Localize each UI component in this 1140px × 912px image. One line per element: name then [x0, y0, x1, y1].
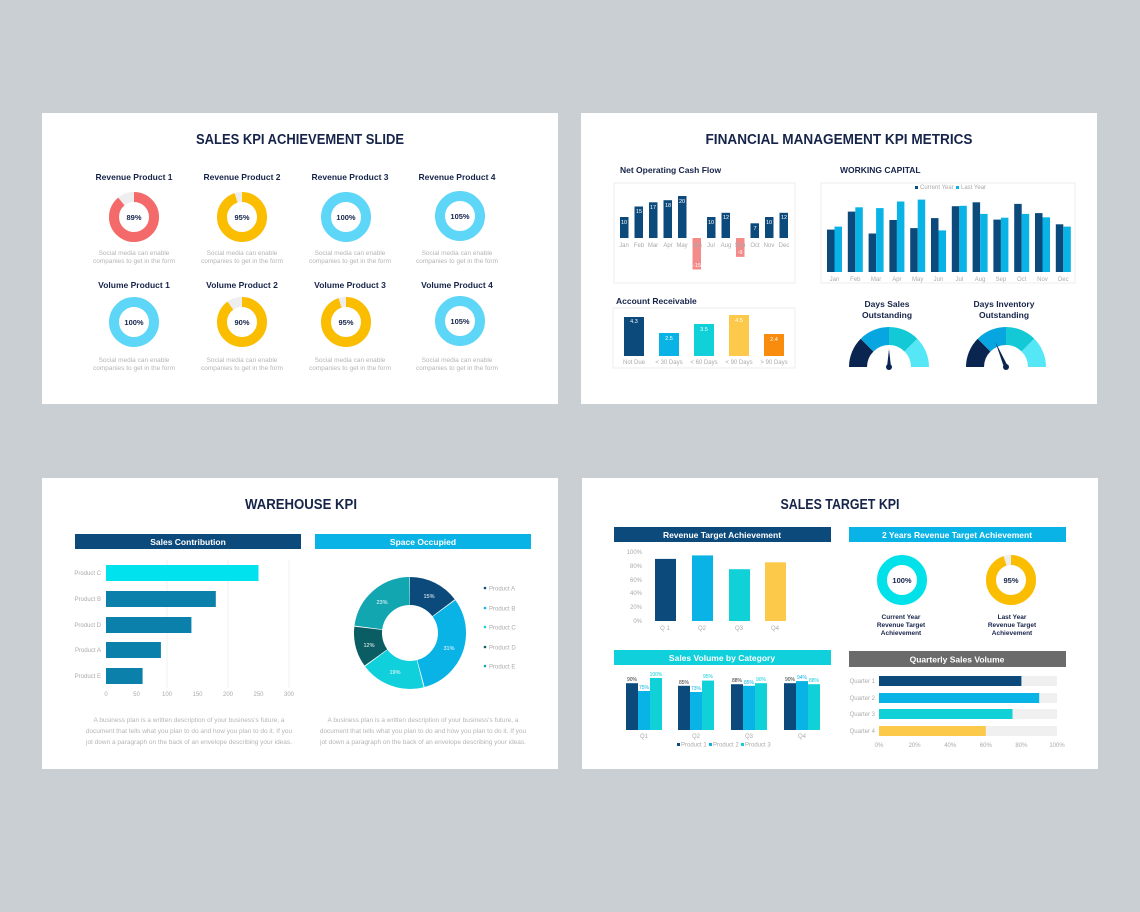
title: sales target: SALES TARGET KPI	[780, 497, 900, 513]
kpi: revenue product 2: 95%	[234, 213, 250, 222]
kpi: revenue product 4: companies to get in the form	[416, 258, 498, 265]
chart: net operating cash flow: Jul	[707, 243, 715, 249]
chart: net operating cash flow: 18	[665, 203, 671, 209]
chart: working capital: Nov	[1037, 277, 1048, 283]
header: revenue target achievement	[614, 527, 831, 542]
kpi: revenue product 2: Social media can enable	[207, 250, 278, 257]
chart: space occupied donut: Product C	[489, 626, 516, 632]
chart: quarterly sales horizontal bars: 40%	[944, 743, 957, 749]
kpi: revenue product 4: Social media can enable	[422, 250, 493, 257]
chart: sales contribution bars: Product E	[75, 674, 101, 680]
panel: sales target kpi	[582, 478, 1098, 769]
chart: sales contribution bars: 150	[192, 692, 203, 698]
header: 2 years revenue target	[849, 527, 1066, 542]
panel: warehouse kpi	[42, 478, 558, 769]
chart: sales volume grouped bars: 75%	[639, 685, 650, 691]
chart: quarterly sales horizontal bars: Quarter 1	[850, 679, 876, 685]
chart: sales volume grouped bars: 88%	[732, 678, 743, 684]
chart: sales volume grouped bars: Q1	[640, 734, 649, 740]
chart: sales volume grouped bars: Q4	[798, 734, 807, 740]
chart: sales contribution bars: Product C	[74, 571, 102, 577]
kpi: volume product 3: Volume Product 3	[314, 280, 386, 290]
gauge: days sales outstanding	[849, 299, 929, 370]
chart: sales contribution bars: 50	[133, 692, 140, 698]
kpi: revenue product 3: 100%	[336, 213, 356, 222]
donut: last year: Last Year	[998, 614, 1027, 621]
gauge: days sales outstanding: Outstanding	[862, 310, 912, 320]
chart: sales contribution bars: 300	[284, 692, 295, 698]
title: sales kpi: SALES KPI ACHIEVEMENT SLIDE	[196, 132, 404, 148]
kpi: volume product 2: Volume Product 2	[206, 280, 278, 290]
panel: financial management	[581, 113, 1097, 404]
chart: quarterly sales horizontal bars: Quarter 2	[850, 696, 876, 702]
header: space occupied: Space Occupied	[390, 537, 456, 547]
chart: sales volume grouped bars: 88%	[809, 678, 820, 684]
donut: current year: 100%	[892, 576, 912, 585]
chart: account receivable: 2.4	[770, 337, 778, 343]
chart: account receivable: 4.3	[630, 319, 638, 325]
chart: quarterly sales horizontal bars: 20%	[909, 743, 921, 749]
header: revenue target achievement: Revenue Target Achievement	[663, 530, 781, 540]
title: warehouse: WAREHOUSE KPI	[245, 497, 357, 513]
chart: net operating cash flow: May	[676, 243, 688, 249]
chart: working capital: Apr	[892, 277, 902, 283]
chart: working capital: Jul	[955, 277, 963, 283]
chart: account receivable: Not Due	[623, 360, 646, 366]
kpi: volume product 1: companies to get in the form	[93, 365, 175, 372]
header: quarterly sales volume: Quarterly Sales Volume	[910, 654, 1005, 664]
kpi: revenue product 1: Social media can enable	[99, 250, 170, 257]
header: sales volume by category: Sales Volume by Category	[669, 653, 775, 663]
kpi: volume product 2: companies to get in the form	[201, 365, 283, 372]
chart: sales volume grouped bars: Product 2	[713, 742, 739, 748]
chart: space occupied donut: Product E	[489, 664, 515, 670]
kpi: volume product 4: 105%	[450, 317, 470, 326]
chart: working capital: Oct	[1017, 277, 1027, 283]
gauge: days inventory outstanding: Days Inventory	[974, 299, 1035, 309]
chart: sales volume grouped bars: 94%	[797, 675, 808, 681]
chart: sales contribution bars: 250	[253, 692, 264, 698]
chart: sales volume grouped bars: 90%	[756, 677, 767, 683]
chart: net operating cash flow	[614, 165, 795, 283]
chart: net operating cash flow: 10	[708, 220, 714, 226]
chart: sales volume grouped bars	[626, 672, 820, 748]
chart: account receivable: 3.5	[700, 327, 708, 333]
chart: revenue target bars: 40%	[630, 591, 643, 597]
text: description right	[319, 717, 527, 746]
chart: net operating cash flow: 20	[679, 199, 685, 205]
kpi: volume product 3	[309, 280, 391, 372]
chart: net operating cash flow: 10	[621, 220, 627, 226]
donut: last year: 95%	[1003, 576, 1019, 585]
chart: account receivable: 2.5	[665, 336, 673, 342]
chart: net operating cash flow: Aug	[721, 243, 731, 249]
chart: working capital: Last Year	[961, 185, 986, 191]
gauge: days sales outstanding: Days Sales	[865, 299, 910, 309]
donut: last year: Achievement	[992, 630, 1033, 637]
kpi: volume product 4: companies to get in the form	[416, 365, 498, 372]
chart: space occupied donut: 19%	[389, 670, 401, 676]
chart: sales volume grouped bars: Product 3	[745, 742, 771, 748]
donut: current year: Current Year	[882, 614, 921, 621]
kpi: revenue product 2: companies to get in the form	[201, 258, 283, 265]
chart: quarterly sales horizontal bars: Quarter 4	[850, 729, 876, 735]
kpi: revenue product 1: 89%	[126, 213, 142, 222]
chart: space occupied donut	[363, 586, 516, 676]
chart: net operating cash flow: 7	[753, 226, 757, 232]
kpi: revenue product 3: companies to get in the form	[309, 258, 391, 265]
chart: account receivable: < 30 Days	[655, 360, 683, 366]
donut: current year: Achievement	[881, 630, 922, 637]
chart: working capital: Jan	[830, 277, 839, 283]
chart: net operating cash flow: Jun	[692, 243, 702, 249]
chart: sales volume grouped bars: Product 1	[681, 742, 707, 748]
header: sales volume by category	[614, 650, 831, 665]
chart: working capital: WORKING CAPITAL	[840, 165, 921, 175]
chart: working capital: May	[912, 277, 923, 283]
chart: sales volume grouped bars: 90%	[627, 677, 638, 683]
chart: space occupied donut: Product D	[489, 646, 516, 652]
kpi: volume product 4	[416, 280, 498, 372]
kpi: revenue product 1: companies to get in the form	[93, 258, 175, 265]
chart: quarterly sales horizontal bars: 80%	[1015, 743, 1028, 749]
chart: working capital: Dec	[1058, 277, 1069, 283]
chart: revenue target bars: 20%	[630, 605, 643, 611]
chart: revenue target bars: Q 1	[660, 626, 670, 632]
chart: revenue target bars: Q3	[735, 626, 744, 632]
chart: sales volume grouped bars: Q2	[692, 734, 701, 740]
chart: revenue target bars: 80%	[630, 564, 643, 570]
chart: working capital: Aug	[975, 277, 985, 283]
chart: revenue target bars: Q4	[771, 626, 780, 632]
chart: sales contribution bars	[74, 560, 295, 698]
header: sales contribution: Sales Contribution	[150, 537, 226, 547]
chart: net operating cash flow: 12	[723, 215, 729, 221]
chart: sales volume grouped bars: 90%	[785, 677, 796, 683]
chart: sales contribution bars: Product B	[75, 597, 101, 603]
text: description left: document that tells what you plan to do and how you plan to do it. If you	[86, 728, 293, 735]
header: sales contribution	[75, 534, 301, 549]
chart: net operating cash flow: 17	[650, 205, 656, 211]
kpi: volume product 4: Volume Product 4	[421, 280, 493, 290]
chart: sales contribution bars: 200	[223, 692, 234, 698]
donut: current year	[877, 560, 926, 637]
kpi: revenue product 4: 105%	[450, 212, 470, 221]
kpi: volume product 3: Social media can enable	[315, 357, 386, 364]
chart: net operating cash flow: Apr	[663, 243, 673, 249]
chart: account receivable: 4.5	[735, 318, 743, 324]
chart: sales volume grouped bars: 100%	[650, 672, 663, 678]
chart: net operating cash flow: -15	[693, 263, 701, 269]
kpi: volume product 2	[201, 280, 283, 372]
chart: net operating cash flow: -9	[738, 250, 742, 256]
text: description right: document that tells what you plan to do and how you plan to do it. If you	[320, 728, 527, 735]
kpi: volume product 2: Social media can enable	[207, 357, 278, 364]
chart: space occupied donut: Product A	[489, 586, 515, 592]
chart: account receivable: Account Receivable	[616, 296, 697, 306]
chart: sales contribution bars: 0	[104, 692, 108, 698]
chart: net operating cash flow: Sep	[735, 243, 746, 249]
chart: net operating cash flow: Mar	[648, 243, 658, 249]
kpi: revenue product 4: Revenue Product 4	[418, 172, 496, 182]
chart: working capital: Feb	[850, 277, 861, 283]
text: description left: jot down a paragraph on the back of an envelope describing your ideas.	[85, 739, 292, 746]
chart: net operating cash flow: Feb	[634, 243, 645, 249]
donut: current year: Revenue Target	[877, 622, 926, 629]
kpi: revenue product 2	[201, 172, 283, 265]
chart: net operating cash flow: 10	[766, 220, 772, 226]
panel: sales kpi achievement	[42, 113, 558, 404]
chart: net operating cash flow: Jan	[619, 243, 629, 249]
chart: working capital: Mar	[871, 277, 881, 283]
kpi: revenue product 1	[93, 172, 175, 265]
chart: space occupied donut: 12%	[363, 643, 375, 649]
kpi: volume product 4: Social media can enable	[422, 357, 493, 364]
chart: revenue target bars	[627, 550, 786, 632]
kpi: revenue product 1: Revenue Product 1	[96, 172, 173, 182]
kpi: volume product 1: 100%	[124, 318, 144, 327]
chart: revenue target bars: Q2	[698, 626, 707, 632]
kpi: volume product 2: 90%	[234, 318, 250, 327]
chart: quarterly sales horizontal bars: Quarter 3	[850, 712, 876, 718]
chart: space occupied donut: 23%	[376, 600, 388, 606]
chart: account receivable	[613, 296, 795, 368]
chart: sales contribution bars: Product A	[75, 648, 101, 654]
gauge: days inventory outstanding: Outstanding	[979, 310, 1029, 320]
kpi: revenue product 3: Social media can enable	[315, 250, 386, 257]
kpi: volume product 1: Social media can enable	[99, 357, 170, 364]
kpi: revenue product 4	[416, 172, 498, 265]
kpi: volume product 3: companies to get in the form	[309, 365, 391, 372]
chart: quarterly sales horizontal bars: 60%	[980, 743, 992, 749]
chart: net operating cash flow: Net Operating Cash Flow	[620, 165, 721, 175]
chart: quarterly sales horizontal bars: 0%	[875, 743, 884, 749]
chart: sales volume grouped bars: 85%	[744, 680, 755, 686]
chart: net operating cash flow: 15	[636, 209, 642, 215]
chart: working capital: Current Year	[920, 185, 954, 191]
kpi: revenue product 2: Revenue Product 2	[204, 172, 281, 182]
header: space occupied	[315, 534, 531, 549]
chart: account receivable: > 90 Days	[760, 360, 788, 366]
chart: sales volume grouped bars: 73%	[691, 686, 702, 692]
header: quarterly sales volume	[849, 651, 1066, 667]
text: description right: jot down a paragraph on the back of an envelope describing your ideas.	[319, 739, 526, 746]
chart: account receivable: < 90 Days	[725, 360, 753, 366]
chart: space occupied donut: 15%	[423, 594, 435, 600]
header: 2 years revenue target: 2 Years Revenue Target Achievement	[882, 530, 1032, 540]
chart: space occupied donut: Product B	[489, 606, 515, 612]
chart: space occupied donut: 31%	[443, 646, 455, 652]
kpi: volume product 1	[93, 280, 175, 372]
chart: revenue target bars: 0%	[633, 619, 643, 625]
chart: sales volume grouped bars: 85%	[679, 680, 690, 686]
chart: net operating cash flow: Dec	[779, 243, 789, 249]
text: description right: A business plan is a written description of your business's future, a	[328, 717, 519, 724]
chart: sales contribution bars: Product D	[74, 623, 102, 629]
gauge: days inventory outstanding	[966, 299, 1046, 370]
kpi: revenue product 3	[309, 172, 391, 265]
chart: sales volume grouped bars: Q3	[745, 734, 754, 740]
chart: working capital: Sep	[996, 277, 1007, 283]
chart: quarterly sales horizontal bars	[850, 676, 1065, 749]
chart: quarterly sales horizontal bars: 100%	[1049, 743, 1065, 749]
chart: working capital	[821, 165, 1075, 283]
title: financial: FINANCIAL MANAGEMENT KPI METRICS	[706, 132, 973, 148]
chart: working capital: Jun	[934, 277, 943, 283]
kpi: revenue product 3: Revenue Product 3	[312, 172, 389, 182]
kpi: volume product 1: Volume Product 1	[98, 280, 170, 290]
chart: net operating cash flow: Oct	[750, 243, 760, 249]
chart: revenue target bars: 60%	[630, 578, 643, 584]
chart: account receivable: < 60 Days	[690, 360, 718, 366]
text: description left	[85, 717, 293, 746]
donut: last year	[988, 560, 1037, 637]
chart: sales volume grouped bars: 95%	[703, 674, 714, 680]
chart: net operating cash flow: Nov	[764, 243, 774, 249]
donut: last year: Revenue Target	[988, 622, 1037, 629]
kpi: volume product 3: 95%	[338, 318, 354, 327]
chart: sales contribution bars: 100	[162, 692, 173, 698]
text: description left: A business plan is a written description of your business's future, a	[94, 717, 285, 724]
chart: net operating cash flow: 12	[781, 215, 787, 221]
chart: revenue target bars: 100%	[627, 550, 643, 556]
